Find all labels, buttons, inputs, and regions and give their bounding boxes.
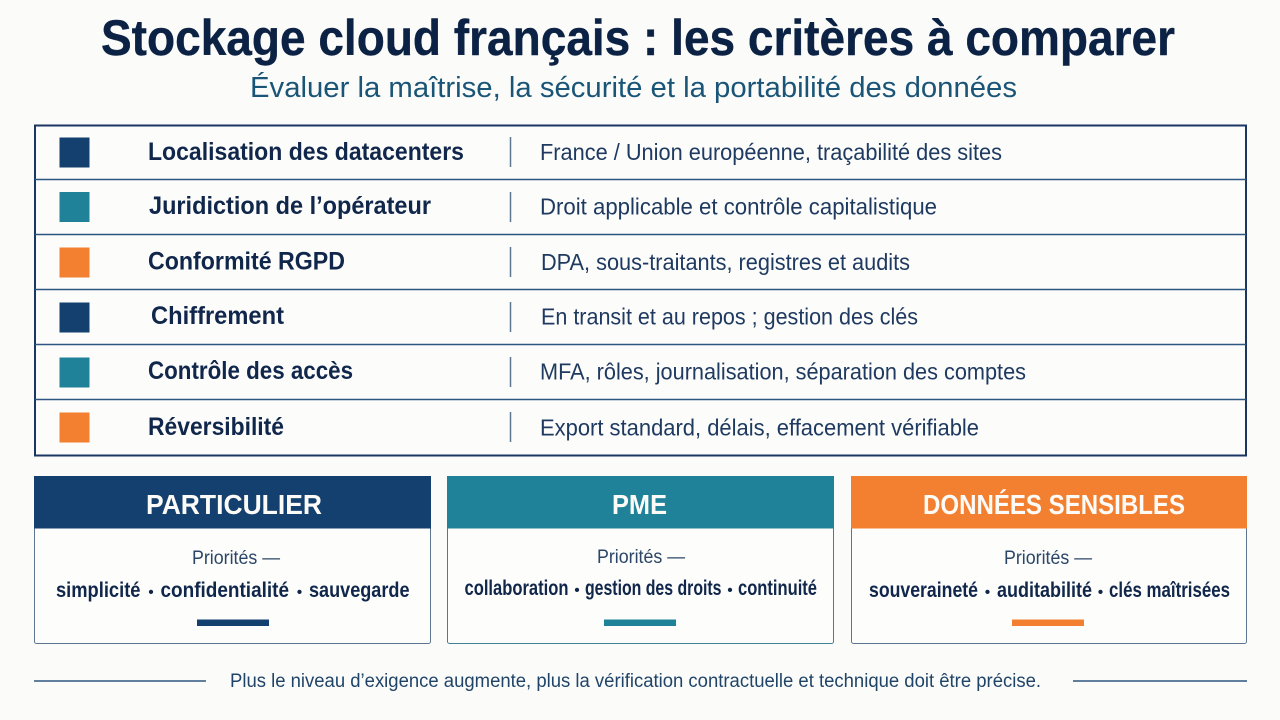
panel: particulier: • [148, 584, 154, 601]
row: conformité [60, 248, 910, 278]
row: réversibilité: Export standard, délais, effacement vérifiable [540, 414, 979, 440]
panel: données sensibles: souveraineté [869, 578, 978, 602]
panel: données sensibles: auditabilité [997, 578, 1092, 602]
panel: PME: Priorités — [597, 547, 685, 568]
row: localisation: Localisation des datacenters [148, 138, 464, 166]
footer note: Plus le niveau d’exigence augmente, plus la vérification contractuelle et technique doit être précise. [230, 671, 1041, 692]
panel: données sensibles: • [1098, 584, 1103, 601]
row: chiffrement: En transit et au repos ; gestion des clés [541, 304, 918, 330]
row: localisation [60, 138, 1002, 168]
title: Stockage cloud français : les critères à comparer [101, 10, 1175, 66]
row: chiffrement: Chiffrement [151, 302, 285, 330]
panel: particulier: sauvegarde [309, 578, 410, 602]
panel: particulier: confidentialité [160, 578, 289, 602]
row: contrôle des accès: MFA, rôles, journalisation, séparation des comptes [540, 358, 1026, 384]
panel: PME: • [727, 582, 733, 599]
row: chiffrement [60, 302, 918, 332]
panel: PME: collaboration [464, 576, 568, 600]
panel: particulier: • [297, 584, 302, 601]
panel: particulier: simplicité [56, 578, 141, 602]
panel: particulier [34, 476, 431, 644]
row: juridiction: Juridiction de l’opérateur [149, 192, 431, 220]
panel: PME: gestion des droits [585, 576, 722, 600]
row: contrôle des accès: Contrôle des accès [148, 357, 353, 385]
panel: criteria table [35, 126, 1246, 456]
panel: données sensibles [851, 476, 1247, 644]
row: contrôle des accès [60, 357, 1026, 388]
panel: PME: • [574, 582, 580, 599]
subtitle: Évaluer la maîtrise, la sécurité et la portabilité des données [250, 71, 1017, 104]
panel: données sensibles: • [985, 584, 990, 601]
row: conformité: Conformité RGPD [148, 248, 345, 276]
panel: PME: continuité [738, 576, 817, 600]
panel: données sensibles: DONNÉES SENSIBLES [923, 489, 1185, 520]
row: juridiction: Droit applicable et contrôle capitalistique [540, 194, 937, 220]
row: conformité: DPA, sous-traitants, registres et audits [541, 249, 910, 275]
panel: particulier: PARTICULIER [146, 489, 322, 520]
panel: données sensibles: clés maîtrisées [1109, 578, 1230, 602]
panel: PME: PME [612, 489, 667, 520]
panel: particulier: Priorités — [192, 548, 280, 569]
row: réversibilité: Réversibilité [148, 413, 284, 441]
panel: PME [447, 476, 834, 644]
panel: données sensibles: Priorités — [1004, 548, 1092, 569]
row: juridiction [60, 192, 937, 222]
row: localisation: France / Union européenne, traçabilité des sites [540, 139, 1002, 165]
row: réversibilité [60, 412, 979, 442]
